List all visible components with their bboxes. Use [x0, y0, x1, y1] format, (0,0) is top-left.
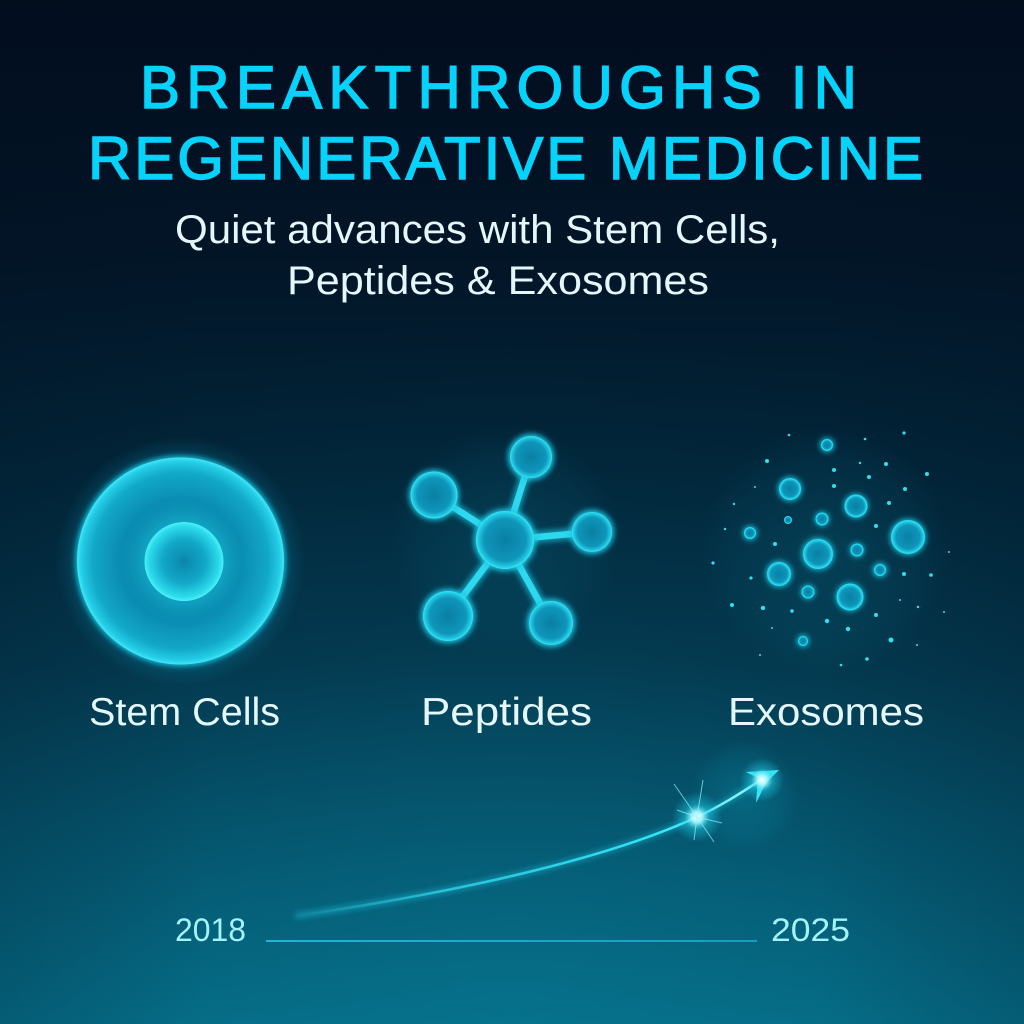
- icon: exosome cluster: [700, 425, 950, 675]
- label: 2018: 2018: [175, 912, 246, 948]
- timeline axis: [266, 940, 757, 942]
- label: stem cells: Stem Cells: [89, 691, 280, 734]
- timeline growth arrow: [295, 740, 800, 916]
- title: [88, 54, 923, 192]
- icon: sparkle: [672, 780, 722, 842]
- icon: arrowhead: [740, 758, 784, 803]
- label: peptides: Peptides: [421, 691, 592, 734]
- icon: stem cell: [56, 436, 306, 686]
- label: 2025: 2025: [771, 912, 850, 948]
- label: exosomes: Exosomes: [728, 691, 924, 734]
- title: REGENERATIVE MEDICINE: [88, 125, 923, 192]
- subtitle: Quiet advances with Stem Cells,: [175, 208, 780, 252]
- subtitle: [175, 208, 780, 303]
- subtitle: Peptides & Exosomes: [287, 259, 709, 303]
- title: BREAKTHROUGHS IN: [140, 54, 857, 121]
- icon: peptide molecule: [390, 425, 620, 655]
